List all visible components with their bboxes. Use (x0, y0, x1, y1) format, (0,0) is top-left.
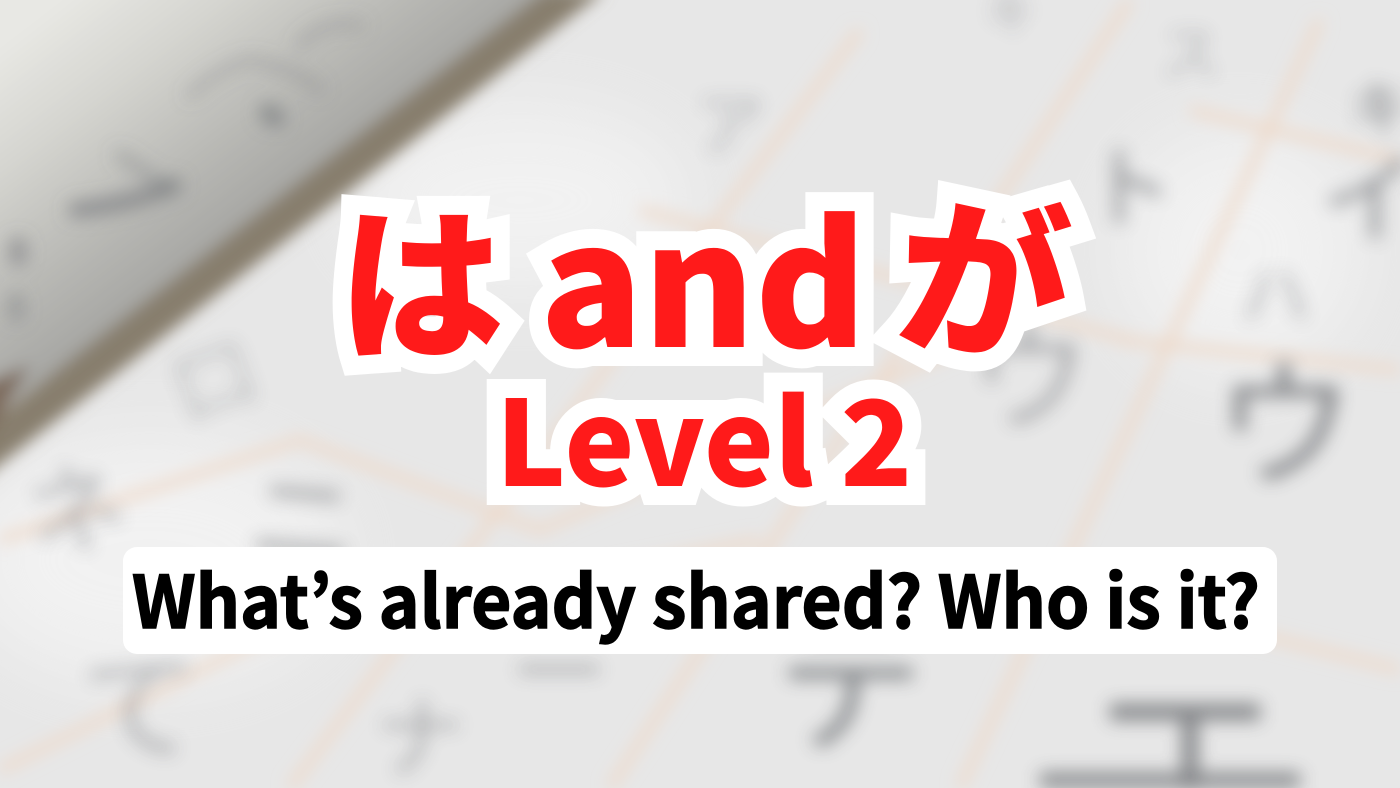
title: は and が: and (540, 150, 867, 396)
title: は and が (338, 138, 1082, 401)
binding (0, 0, 605, 480)
title: は and が: が (887, 138, 1082, 401)
title: は and が: は (338, 153, 504, 394)
blurred kana characters: ナ (375, 690, 465, 788)
blurred kana characters: ロ (155, 319, 274, 444)
soft paper highlights (0, 110, 1360, 680)
blurred kana characters: ハ (1240, 257, 1310, 335)
blurred kana characters: ネ (13, 445, 139, 579)
blurred kana characters: ア (695, 87, 765, 165)
blurred kana characters: テ (775, 604, 925, 772)
blurred kana characters: ウ (1215, 348, 1355, 505)
heading: Level 2: Level 2 (496, 349, 912, 520)
blurred kana characters: ウ (970, 312, 1090, 446)
blurred lower-right strokes (1040, 712, 1300, 788)
blurred kana characters: ソ (1120, 576, 1180, 643)
blurred page marks (16, 24, 360, 315)
left page (0, 0, 590, 435)
blurred kana characters: ス (1160, 21, 1220, 88)
blurred kana characters: ニ (510, 590, 610, 702)
blurred kana characters: て (80, 642, 200, 776)
subtitle banner: What’s already shared? Who is it? (132, 544, 1260, 649)
blurred kana characters: ニ (243, 457, 363, 589)
blurred kana characters: ト (1085, 140, 1175, 240)
